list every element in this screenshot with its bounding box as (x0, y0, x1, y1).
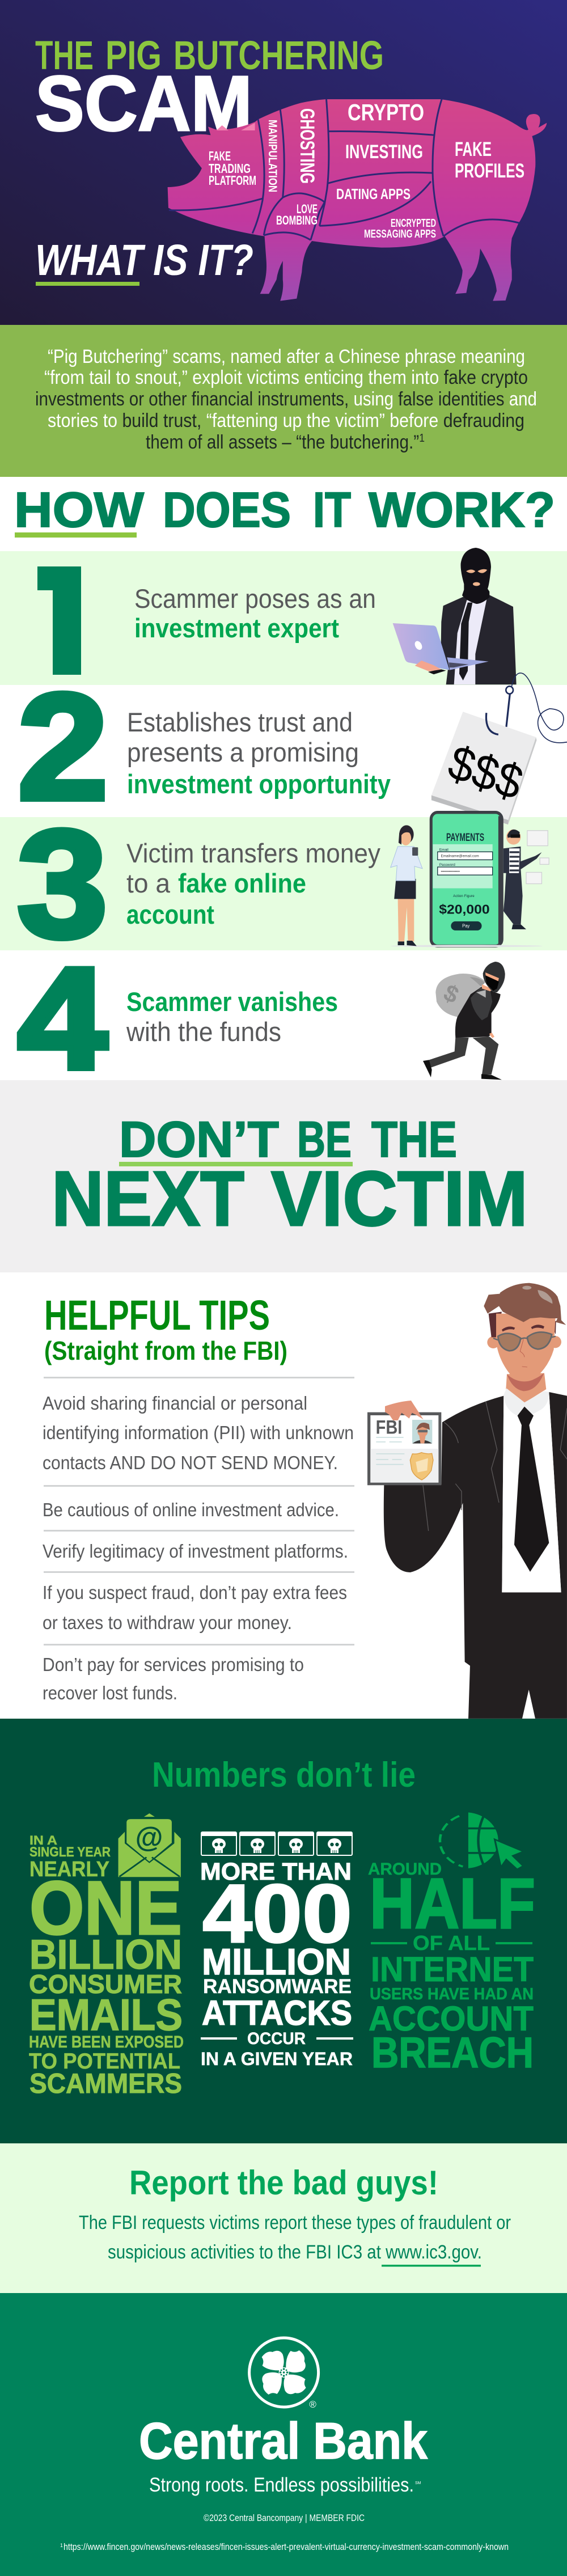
icon: fishing hook with money tag (431, 673, 567, 824)
panel: don't be the next victim (0, 1080, 567, 1272)
icon: payment phone with victim and thief: $20,000 (439, 902, 490, 917)
stat column: one billion emails: BILLION (29, 1932, 182, 1978)
panel: step 1 (0, 548, 567, 685)
panel: definition paragraph: them of all assets – “the butchering.” (146, 432, 458, 453)
icon: payment phone with victim and thief: ••••••••••••••• (441, 870, 460, 874)
step 4 text: with the funds (126, 1017, 281, 1047)
heading: don't be the: BE (297, 1111, 352, 1168)
stat column: 400 million ransomware attacks: IN A GIVEN YEAR (201, 2049, 353, 2069)
title: scam: SCAM (35, 60, 252, 147)
stat column: half of internet users (368, 1860, 535, 2077)
label: fake profiles (455, 138, 524, 182)
step 4 text: Scammer vanishes (126, 987, 338, 1017)
label: fake trading platform: TRADING (209, 161, 251, 176)
stat column: 400 million ransomware attacks: RANSOMWARE (203, 1976, 352, 1998)
number 1 (37, 566, 81, 675)
label: fake profiles: PROFILES (455, 160, 524, 182)
heading: next victim (52, 1156, 528, 1242)
icon: fbi agent with badge: FBI (376, 1416, 402, 1438)
tagline: Strong roots. Endless possibilities. (149, 2474, 414, 2496)
brand name: Central Bank (139, 2413, 428, 2470)
pig silhouette (168, 99, 547, 301)
heading: helpful tips: (Straight from the FBI) (44, 1336, 287, 1365)
hero panel: what is it (0, 0, 567, 325)
heading: don't be the: DON’T (119, 1111, 279, 1168)
heading: what is it: WHAT IS IT? (35, 236, 253, 285)
icon: globe with cursor (440, 1812, 524, 1869)
tip list: recover lost funds. (43, 1682, 177, 1703)
panel: helpful tips (43, 1283, 567, 1719)
tip list: Don’t pay for services promising to (43, 1654, 304, 1675)
step 3 text: Victim transfers money (126, 838, 380, 868)
stat column: one billion emails: HAVE BEEN EXPOSED (29, 2033, 184, 2052)
step 1 text (134, 583, 376, 643)
title: the pig butchering: BUTCHERING (174, 33, 384, 78)
footnote source url: 1 (60, 2543, 63, 2548)
heading: helpful tips: HELPFUL TIPS (44, 1292, 270, 1339)
icon: payment phone with victim and thief: PAYMENTS (446, 831, 484, 844)
icon: payment phone with victim and thief: Password (439, 863, 455, 867)
tip list: Verify legitimacy of investment platforms. (43, 1541, 348, 1562)
copyright: ©2023 Central Bancompany | MEMBER FDIC (204, 2512, 365, 2523)
step 1 text: investment expert (134, 613, 339, 643)
icon: payment phone with victim and thief: Emailname@email.com (441, 855, 479, 858)
tip list: identifying information (PII) with unknown (43, 1422, 354, 1443)
logo: dogwood flower in circle (249, 2338, 319, 2410)
heading: don't be the (119, 1111, 457, 1168)
report instructions (79, 2212, 511, 2267)
step 2 text: Establishes trust and (127, 707, 353, 737)
stat column: 400 million ransomware attacks: ATTACKS (202, 1994, 352, 2032)
stat column: one billion emails: ONE (29, 1866, 182, 1951)
heading: report the bad guys: Report the bad guys! (129, 2164, 438, 2202)
tip list: or taxes to withdraw your money. (43, 1612, 292, 1633)
stat column: 400 million ransomware attacks: 400 (202, 1867, 352, 1960)
stat column: one billion emails: EMAILS (29, 1990, 183, 2040)
logo: dogwood flower in circle: ® (309, 2399, 316, 2410)
label: crypto: CRYPTO (348, 99, 424, 125)
stat column: one billion emails: SCAMMERS (29, 2069, 182, 2099)
panel: central bank footer (0, 2293, 567, 2576)
tip list: Be cautious of online investment advice. (43, 1499, 339, 1520)
stat column: 400 million ransomware attacks: MORE THAN (200, 1858, 352, 1885)
step 3 text: to a (126, 868, 171, 898)
icon: open envelope with at sign: @ (136, 1821, 163, 1853)
step 3 text (126, 838, 380, 929)
stat column: one billion emails (29, 1833, 184, 2099)
panel: numbers don't lie (0, 1719, 567, 2143)
stat column: half of internet users: USERS HAVE HAD AN (370, 1985, 534, 2003)
panel: definition paragraph: 1 (419, 432, 425, 445)
title: the pig butchering (35, 33, 384, 78)
label: investing: INVESTING (345, 141, 423, 163)
step 2 text: presents a promising (127, 737, 359, 767)
icon: payment phone with victim and thief (391, 813, 549, 947)
stat column: half of internet users: AROUND (368, 1860, 442, 1879)
tip list: If you suspect fraud, don’t pay extra fees (43, 1582, 347, 1603)
step 3 text: fake online (178, 868, 306, 898)
step 2 text (127, 707, 391, 799)
label: encrypted messaging apps: ENCRYPTED (391, 217, 436, 230)
icon: skull browser windows (201, 1832, 352, 1855)
stat column: one billion emails: CONSUMER (29, 1969, 182, 1999)
icon: payment phone with victim and thief: Pay (462, 923, 469, 929)
panel: step 2 (18, 662, 391, 831)
tip list (43, 1393, 354, 1703)
panel: report the bad guys (0, 2143, 567, 2293)
stat column: half of internet users: BREACH (371, 2029, 534, 2077)
icon: payment phone with victim and thief: Action Figure (453, 894, 475, 898)
icon: masked scammer with laptop (393, 548, 517, 684)
label: fake trading platform (209, 149, 256, 188)
step 2 text: investment opportunity (127, 769, 391, 799)
panel: step 3 (0, 799, 567, 970)
stat column: half of internet users: OF ALL (413, 1931, 490, 1955)
heading: how does it work: DOES (163, 483, 291, 538)
step 3 text: account (126, 899, 214, 929)
label: manipulation: MANIPULATION (266, 120, 279, 192)
number 2: 2 (18, 662, 108, 831)
report instructions: suspicious activities to the FBI IC3 at www.ic3.gov. (108, 2241, 482, 2263)
label: encrypted messaging apps (364, 217, 436, 240)
heading: how does it work: HOW (14, 483, 145, 538)
number 3: 3 (17, 799, 108, 970)
stat column: one billion emails: IN A (29, 1833, 57, 1847)
label: ghosting: GHOSTING (296, 108, 318, 184)
number 1: 1 (26, 537, 108, 703)
icon: fishing hook with money tag: $$$ (442, 734, 529, 810)
label: encrypted messaging apps: MESSAGING APPS (364, 228, 436, 240)
panel: definition paragraph: “from tail to snout,” exploit victims enticing them into fake crypto (44, 367, 528, 388)
icon: thief carrying money bag: $ (440, 979, 463, 1009)
heading: helpful tips (44, 1292, 287, 1365)
label: love bombing: BOMBING (276, 213, 318, 227)
stat column: one billion emails: NEARLY (29, 1858, 109, 1881)
heading: next victim: VICTIM (271, 1156, 528, 1242)
stat column: one billion emails: SINGLE YEAR (29, 1845, 111, 1860)
icon: fbi agent with badge (367, 1283, 567, 1719)
label: dating apps: DATING APPS (336, 185, 411, 202)
stat column: one billion emails: TO POTENTIAL (29, 2049, 180, 2074)
stat column: half of internet users: INTERNET (371, 1950, 534, 1989)
icon: thief carrying money bag (423, 962, 505, 1080)
heading: how does it work: IT (313, 483, 351, 538)
label: love bombing: LOVE (297, 202, 318, 216)
heading: next victim: NEXT (52, 1156, 244, 1242)
heading: how does it work: WORK? (369, 483, 555, 538)
title: the pig butchering: PIG (105, 33, 162, 78)
icon: payment phone with victim and thief: Email (439, 848, 448, 852)
tagline: SM (415, 2481, 421, 2485)
stat column: half of internet users: ACCOUNT (369, 1999, 534, 2038)
step 1 text: Scammer poses as an (134, 583, 376, 614)
stat column: 400 million ransomware attacks (200, 1832, 353, 2069)
stat column: 400 million ransomware attacks: MILLION (202, 1941, 351, 1982)
panel: definition paragraph (0, 325, 567, 477)
icon: open envelope with at sign (119, 1813, 181, 1877)
label: fake trading platform: FAKE (209, 149, 231, 163)
panel: step 4 (18, 938, 505, 1099)
panel: definition paragraph: stories to build trust, “fattening up the victim” before defrauding (48, 410, 524, 432)
step 4 text (126, 987, 338, 1047)
pig diagram with labelled cuts (168, 99, 547, 301)
label: fake profiles: FAKE (455, 138, 492, 160)
tip list: contacts AND DO NOT SEND MONEY. (43, 1452, 338, 1473)
heading: how does it work (14, 483, 555, 538)
stat column: 400 million ransomware attacks: OCCUR (247, 2029, 306, 2048)
title: the pig butchering: THE (35, 33, 94, 78)
label: fake trading platform: PLATFORM (209, 173, 256, 188)
stat column: half of internet users: HALF (370, 1864, 535, 1943)
label: love bombing (276, 202, 318, 227)
number 4: 4 (18, 938, 107, 1099)
tip list: Avoid sharing financial or personal (43, 1393, 307, 1414)
heading: numbers don't lie: Numbers don’t lie (152, 1756, 416, 1795)
panel: definition paragraph: investments or other financial instruments, using false identities and (35, 388, 537, 410)
heading: don't be the: THE (371, 1111, 457, 1168)
